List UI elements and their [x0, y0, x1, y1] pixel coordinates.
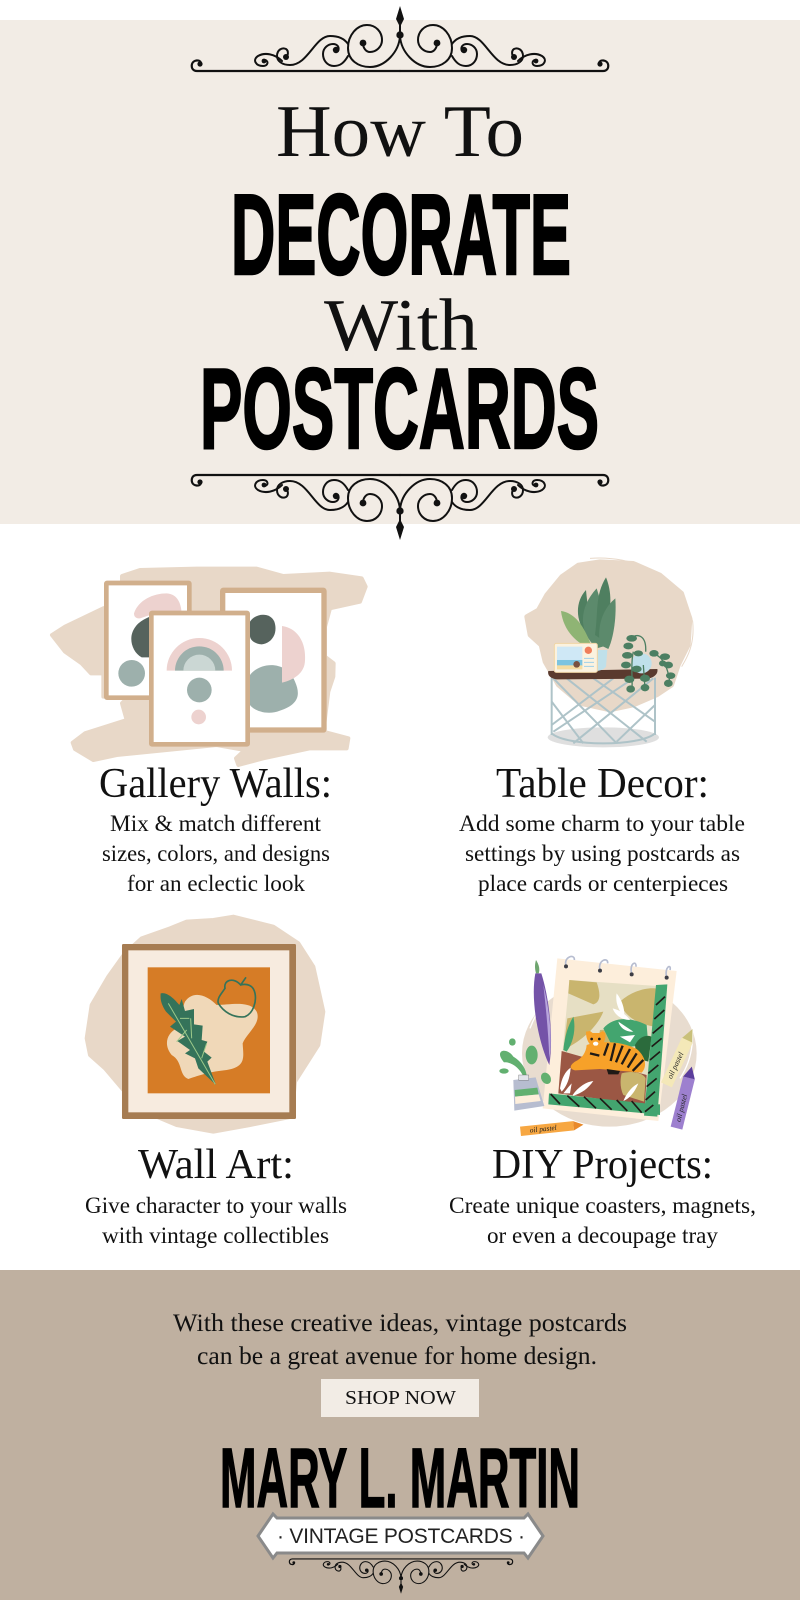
button: shop now [321, 1379, 479, 1417]
text: gallery walls description: for an eclectic look [127, 871, 305, 896]
heading: How To: How To [276, 91, 524, 173]
illustration: art supplies and tiger sketchbook: oil pastel [665, 1051, 685, 1080]
text: wall art description [85, 1193, 347, 1248]
illustration: art supplies and tiger sketchbook [499, 956, 698, 1136]
heading: Table Decor: Table Decor: [496, 761, 709, 807]
text: wall art description: with vintage collectibles [102, 1223, 329, 1248]
panel: DIY projects [449, 956, 756, 1248]
illustration: gallery wall frames [52, 569, 366, 765]
ornament: logo scroll [289, 1559, 513, 1594]
illustration: art supplies and tiger sketchbook: oil pastel [674, 1093, 689, 1123]
heading: Gallery Walls: Gallery Walls: [99, 761, 332, 807]
text: table decor description: place cards or centerpieces [478, 871, 728, 896]
panel: header band [0, 6, 800, 540]
text: DIY projects description: Create unique coasters, magnets, [449, 1193, 756, 1218]
panel: footer band [0, 1270, 800, 1600]
panel: gallery walls [52, 569, 366, 896]
text: closing statement [173, 1310, 627, 1370]
illustration: table with plant and postcard [527, 558, 693, 747]
logo: Mary L. Martin [220, 1431, 580, 1594]
illustration: art supplies and tiger sketchbook: oil pastel [529, 1123, 557, 1135]
text: DIY projects description [449, 1193, 756, 1248]
text: DIY projects description: or even a decoupage tray [487, 1223, 718, 1248]
ornament: top scroll divider [192, 6, 608, 71]
button: shop now: SHOP NOW [345, 1387, 456, 1409]
text: gallery walls description: sizes, colors, and designs [102, 841, 330, 866]
heading: With: With [324, 285, 478, 367]
panel: table decor [459, 558, 745, 896]
logo banner: vintage postcards: · VINTAGE POSTCARDS · [277, 1525, 525, 1548]
illustration: framed leaf art [87, 917, 323, 1132]
text: closing statement: With these creative ideas, vintage postcards [173, 1310, 627, 1337]
ornament: bottom scroll divider [192, 475, 608, 540]
text: table decor description: settings by using postcards as [465, 841, 740, 866]
text: wall art description: Give character to your walls [85, 1193, 347, 1218]
text: gallery walls description: Mix & match different [110, 811, 322, 836]
heading: Wall Art: Wall Art: [138, 1142, 294, 1188]
heading: DIY Projects: DIY Projects: [492, 1142, 713, 1188]
text: gallery walls description [102, 811, 330, 896]
text: table decor description [459, 811, 745, 896]
text: closing statement: can be a great avenue for home design. [197, 1343, 597, 1370]
logo banner: vintage postcards [258, 1514, 543, 1558]
panel: wall art [85, 917, 347, 1248]
text: table decor description: Add some charm to your table [459, 811, 745, 836]
